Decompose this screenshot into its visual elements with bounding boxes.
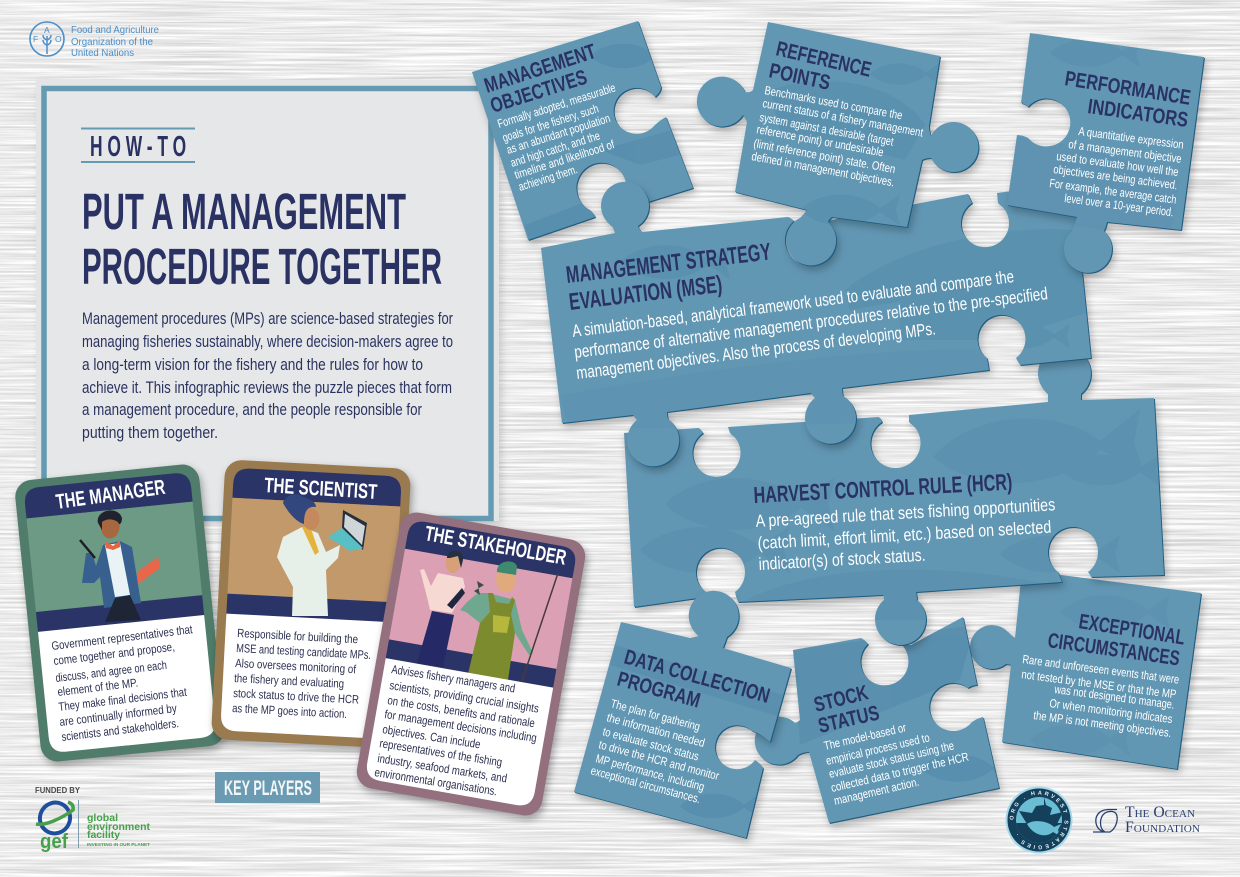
puzzle piece: stock status xyxy=(755,617,1010,823)
FAO logo: O xyxy=(55,34,62,44)
text: management objectives: OBJECTIVES xyxy=(488,66,590,118)
card title: THE MANAGER xyxy=(54,476,167,514)
text: exceptional circumstances: not tested by the MSE or that the MP xyxy=(1021,667,1177,701)
text: data collection program: to evaluate stock status xyxy=(601,724,700,764)
card text: Advises fishery managers and xyxy=(391,662,516,696)
text: performance indicators: A quantitative expression xyxy=(1078,124,1185,152)
text: stock status: STOCK xyxy=(812,681,871,717)
GEF logo: environment xyxy=(87,821,150,833)
panel: how-to intro xyxy=(36,80,499,521)
text: reference points: system against a desirable (target xyxy=(758,110,895,149)
title: PUT A MANAGEMENT xyxy=(82,183,406,240)
text: performance indicators: PERFORMANCE xyxy=(1063,67,1192,110)
card text: They make final decisions that xyxy=(58,685,188,714)
text: performance indicators: of a management objective xyxy=(1068,137,1183,166)
card text: environmental organisations. xyxy=(374,765,498,798)
GEF logo: FUNDED BY xyxy=(35,786,81,795)
text: management strategy evaluation: management objectives. Also the process of developing MPs. xyxy=(575,318,937,383)
text: exceptional circumstances xyxy=(1021,610,1187,740)
text: performance indicators: INDICATORS xyxy=(1086,95,1190,132)
card: the scientist xyxy=(211,459,411,749)
text: exceptional circumstances: CIRCUMSTANCES xyxy=(1046,629,1181,670)
text: reference points: defined in management objectives. xyxy=(750,149,896,189)
intro paragraph: a management procedure, and the people responsible for xyxy=(82,401,422,419)
intro paragraph: putting them together. xyxy=(82,424,218,442)
text: performance indicators: used to evaluate how well the xyxy=(1056,149,1180,179)
intro paragraph: achieve it. This infographic reviews the puzzle pieces that form xyxy=(82,379,452,397)
card: the stakeholder xyxy=(354,510,588,818)
text: management strategy evaluation xyxy=(565,238,1049,383)
GEF logo: global xyxy=(87,812,118,824)
FAO logo: A xyxy=(44,25,50,35)
card text: objectives. Can include xyxy=(382,722,482,751)
card text: element of the MP. xyxy=(57,675,139,699)
text: management objectives: as an abundant population xyxy=(505,111,612,157)
text: reference points: POINTS xyxy=(767,59,832,95)
FAO logo: F xyxy=(33,34,38,44)
GEF logo: facility xyxy=(87,829,120,841)
text: performance indicators: objectives are being achieved. xyxy=(1053,162,1178,192)
text: harvest control rule: A pre-agreed rule that sets fishing opportunities xyxy=(755,494,1056,531)
The Ocean Foundation logo: The Ocean xyxy=(1125,804,1195,821)
puzzle piece: performance indicators xyxy=(1000,33,1204,273)
text: management strategy evaluation: performance of alternative management procedures relative to the pre-specified xyxy=(573,283,1049,362)
FAO logo: United Nations xyxy=(71,47,134,59)
harveststrategies.org logo: ORG . HARVEST STRATEGIES . xyxy=(1010,790,1068,850)
text: management objectives xyxy=(481,40,617,194)
text: data collection program: DATA COLLECTION xyxy=(622,646,772,708)
text: exceptional circumstances: EXCEPTIONAL xyxy=(1077,610,1187,650)
text: exceptional circumstances: Rare and unforeseen events that were xyxy=(1022,652,1180,687)
card text: stock status to drive the HCR xyxy=(233,686,360,707)
card text: on the costs, benefits and rationale xyxy=(387,693,536,730)
card text: industry, seafood markets, and xyxy=(377,751,508,785)
card title: THE STAKEHOLDER xyxy=(423,522,568,570)
text: reference points: current status of a fishery management xyxy=(761,96,925,140)
intro paragraph: Management procedures (MPs) are science-based strategies for xyxy=(82,310,453,328)
text: reference points: (limit reference point) state. Often xyxy=(752,136,897,176)
card title: THE SCIENTIST xyxy=(264,474,378,504)
card text: Government representatives that xyxy=(51,622,194,653)
figure: scientist xyxy=(277,494,367,616)
text: data collection program: the information needed xyxy=(605,710,706,750)
text: management objectives: Formally adopted, measurable xyxy=(496,80,617,131)
text: management strategy evaluation: EVALUATION (MSE) xyxy=(568,271,724,316)
card text: scientists and stakeholders. xyxy=(61,716,180,744)
FAO logo: Food and Agriculture xyxy=(71,24,159,36)
figure: manager xyxy=(80,510,160,622)
key players label: KEY PLAYERS xyxy=(224,777,312,800)
puzzle piece: harvest control rule xyxy=(624,347,1164,645)
GEF logo: INVESTING IN OUR PLANET xyxy=(87,842,150,847)
title xyxy=(82,183,442,295)
text: data collection program: to drive the HCR and monitor xyxy=(597,737,721,783)
text: data collection program: MP performance, including xyxy=(594,751,706,794)
text: management objectives: MANAGEMENT xyxy=(481,40,599,98)
text: reference points xyxy=(750,37,925,189)
card text: Responsible for building the xyxy=(237,626,359,646)
text: management objectives: achieving them. xyxy=(517,162,579,194)
text: management strategy evaluation: A simulation-based, analytical framework used to evaluate and compare the xyxy=(571,266,1015,341)
card text: as the MP goes into action. xyxy=(232,701,347,721)
text: exceptional circumstances: was not designed to manage. xyxy=(1053,682,1175,712)
text: harvest control rule: (catch limit, effort limit, etc.) based on selected xyxy=(757,517,1052,553)
GEF logo xyxy=(35,786,150,853)
title: PROCEDURE TOGETHER xyxy=(82,238,442,295)
card text: scientists, providing crucial insights xyxy=(389,678,540,716)
text: performance indicators xyxy=(1049,67,1192,219)
puzzle piece: data collection program xyxy=(574,591,800,838)
text: reference points: reference point) or undesirable xyxy=(755,122,885,160)
card text: the fishery and evaluating xyxy=(234,671,344,691)
intro paragraph xyxy=(82,310,453,442)
kicker: how-to: HOW-TO xyxy=(90,131,191,163)
text: performance indicators: For example, the average catch xyxy=(1049,176,1177,207)
card text: representatives of the fishing xyxy=(379,736,503,769)
puzzle piece: exceptional circumstances xyxy=(970,570,1201,769)
GEF logo: gef xyxy=(40,831,68,853)
puzzle piece: management strategy evaluation xyxy=(541,182,1095,466)
puzzle piece: reference points xyxy=(697,22,978,265)
text: reference points: REFERENCE xyxy=(774,37,874,82)
card text: for management decisions including xyxy=(384,707,538,745)
text: stock status: The model-based or xyxy=(823,720,908,753)
figure: stakeholder xyxy=(417,551,558,681)
text: stock status: evaluate stock status using the xyxy=(828,738,956,781)
card text: Also oversees monitoring of xyxy=(235,656,357,676)
intro paragraph: managing fisheries sustainably, where decision-makers agree to xyxy=(82,333,453,351)
The Ocean Foundation logo: Foundation xyxy=(1125,819,1200,836)
text: stock status: STATUS xyxy=(816,702,882,738)
The Ocean Foundation logo xyxy=(1093,804,1200,836)
card text xyxy=(51,622,194,744)
card text: discuss, and agree on each xyxy=(55,658,168,685)
text: exceptional circumstances: Or when monitoring indicates xyxy=(1049,696,1173,726)
text: performance indicators: level over a 10-year period. xyxy=(1064,191,1174,219)
key players label xyxy=(215,772,320,803)
text: management objectives: and high catch, and the xyxy=(509,128,602,170)
text: stock status xyxy=(812,681,970,808)
text: data collection program: The plan for gathering xyxy=(609,696,702,734)
text: management objectives: goals for the fishery, such xyxy=(501,101,600,145)
puzzle piece: management objectives xyxy=(472,21,700,245)
text: stock status: collected data to trigger the HCR xyxy=(830,750,970,795)
text: reference points: Benchmarks used to compare the xyxy=(763,83,904,123)
text: data collection program: PROGRAM xyxy=(615,668,703,713)
text: data collection program: exceptional circumstances. xyxy=(589,763,702,806)
FAO logo: Organization of the xyxy=(71,36,153,48)
text: harvest control rule: HARVEST CONTROL RULE (HCR) xyxy=(753,468,1013,508)
text: management objectives: timeline and likelihood of xyxy=(513,137,617,182)
card text xyxy=(232,626,371,721)
text: harvest control rule: indicator(s) of stock status. xyxy=(758,545,926,574)
intro paragraph: a long-term vision for the fishery and the rules for how to xyxy=(82,356,423,374)
card: the manager xyxy=(14,463,226,763)
text: exceptional circumstances: the MP is not meeting objectives. xyxy=(1033,708,1172,740)
text: harvest control rule xyxy=(753,468,1056,574)
FAO logo xyxy=(30,22,159,59)
card text: MSE and testing candidate MPs. xyxy=(236,641,371,662)
card text: are continually informed by xyxy=(59,701,178,729)
text: stock status: management action. xyxy=(833,775,920,808)
text: data collection program xyxy=(589,646,772,806)
text: stock status: empirical process used to xyxy=(825,730,931,768)
text: management strategy evaluation: MANAGEMENT STRATEGY xyxy=(565,238,772,289)
card text: come together and propose, xyxy=(53,640,175,668)
card text xyxy=(374,662,540,798)
